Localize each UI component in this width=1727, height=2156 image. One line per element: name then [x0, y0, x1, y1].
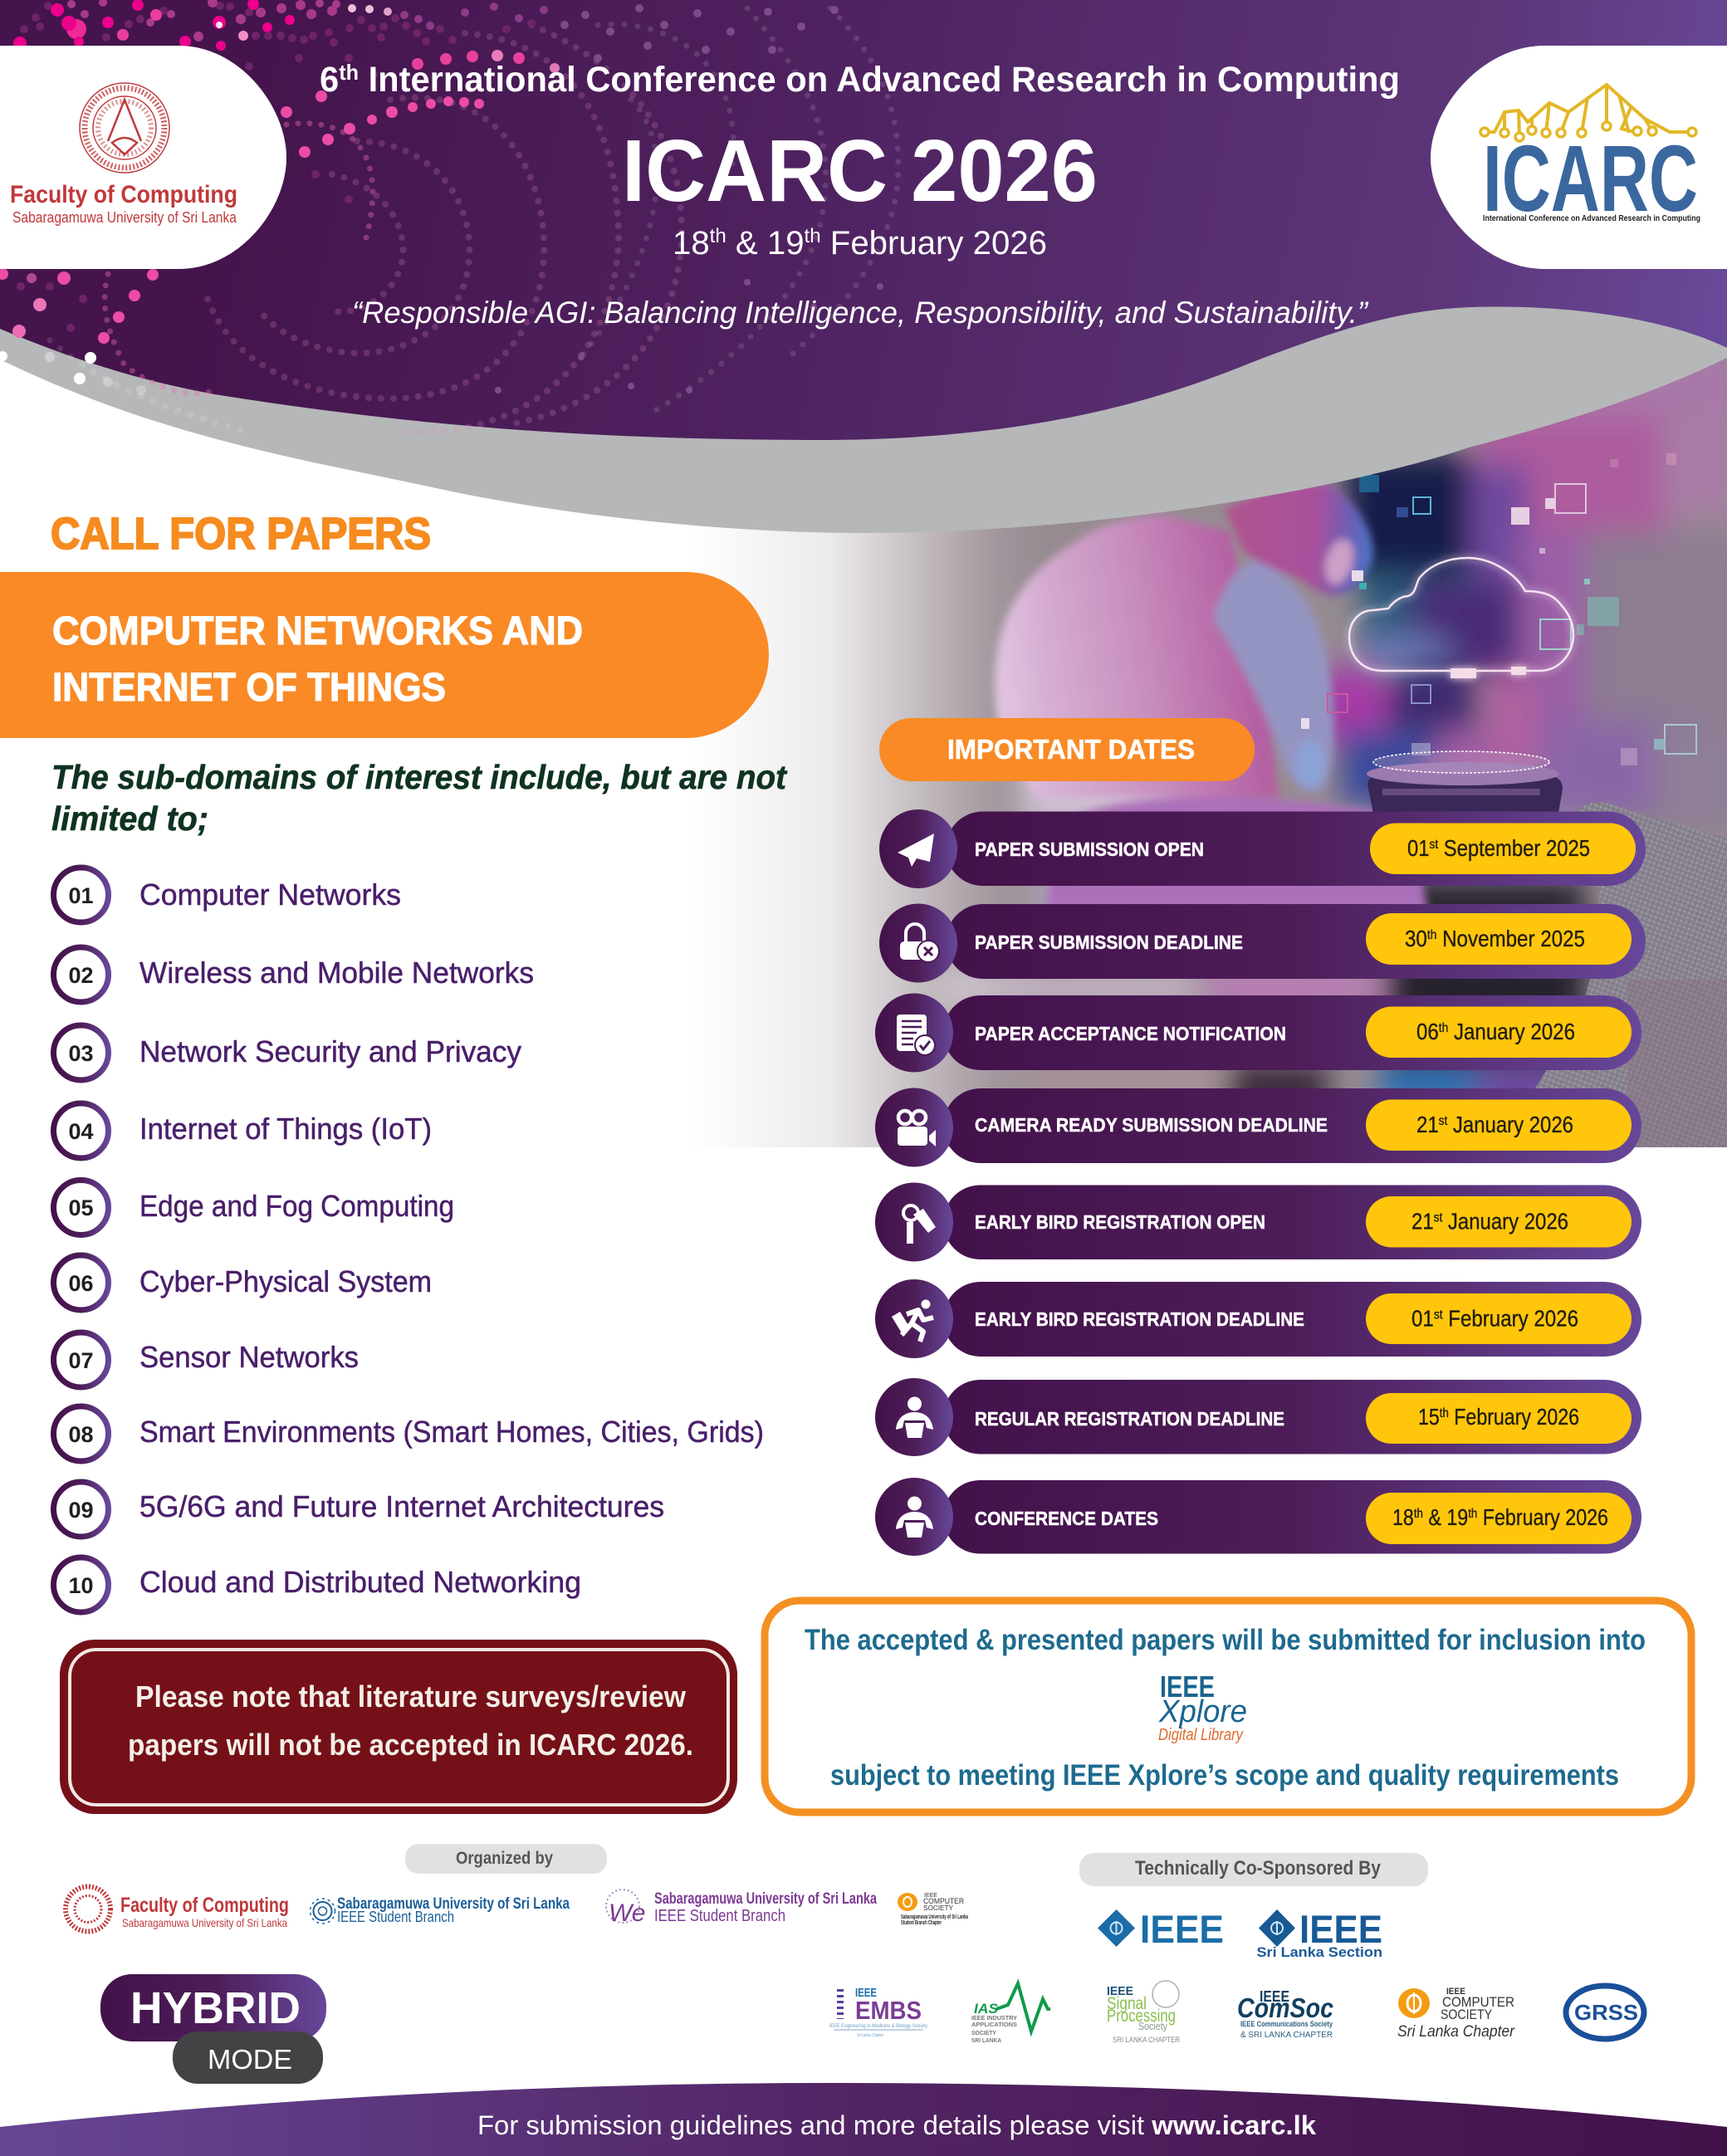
date row: camera ready submission deadline [875, 1088, 1641, 1167]
society logo: GRSS [1566, 1986, 1644, 2039]
date row: camera ready submission deadline: CAMERA READY SUBMISSION DEADLINE [975, 1114, 1328, 1136]
society logo: Computer Society Sri Lanka Chapter: IEEE [1446, 1987, 1465, 1997]
date row: paper submission deadline [879, 903, 1646, 983]
title: ICARC 2026: ICARC 2026 [622, 122, 1098, 220]
date pill: st [1430, 838, 1439, 852]
conference theme: “Responsible AGI: Balancing Intelligence, Responsibility, and Sustainability.” [352, 296, 1369, 330]
organized by label [405, 1844, 607, 1874]
date pill: 15 [1418, 1404, 1444, 1430]
society logo: EMBS: IEEE [855, 1986, 877, 2000]
date row: paper submission open: PAPER SUBMISSION OPEN [975, 838, 1204, 860]
date pill: January 2026 [1447, 1112, 1573, 1137]
date row: conference dates: CONFERENCE DATES [975, 1508, 1158, 1529]
date row: paper acceptance notification: PAPER ACCEPTANCE NOTIFICATION [975, 1023, 1286, 1044]
society logo: EMBS: EMBS [855, 1996, 922, 2025]
society logo: IAS [971, 1983, 1050, 2044]
logo subtitle: Sabaragamuwa University of Sri Lanka [12, 209, 237, 226]
track title: COMPUTER NETWORKS AND [52, 609, 583, 653]
logo: SUSL IEEE Student Branch [311, 1895, 570, 1925]
logo: SUSL IEEE Student Branch: Sabaragamuwa University of Sri Lanka [337, 1895, 570, 1913]
conference date: February 2026 [821, 225, 1047, 262]
bright pink dots [0, 0, 560, 395]
society logo: Computer Society Sri Lanka Chapter: SOCIETY [1441, 2007, 1492, 2022]
date row: conference dates [875, 1478, 1641, 1556]
society logo: Computer Society Sri Lanka Chapter [1397, 1987, 1515, 2041]
important dates heading [879, 718, 1255, 781]
society logo: IAS: IEEE INDUSTRY [971, 2016, 1017, 2022]
IEEE Xplore logo: Xplore [1158, 1694, 1247, 1729]
item 09: 09 [68, 1498, 94, 1523]
item 02: Wireless and Mobile Networks [139, 956, 534, 990]
society logo: ComSoc [1237, 1988, 1333, 2040]
sub-domains intro: The sub-domains of interest include, but are not [51, 758, 788, 796]
date pill [1366, 1099, 1632, 1151]
item 02: 02 [68, 963, 94, 988]
item 06: Cyber-Physical System [139, 1264, 432, 1298]
icon: presenter at podium [875, 1478, 953, 1556]
society logo: IAS: APPLICATIONS [971, 2022, 1017, 2028]
society logo: ComSoc: ComSoc [1237, 1992, 1333, 2023]
date row: paper submission deadline: PAPER SUBMISSION DEADLINE [975, 931, 1243, 953]
date pill: 18 [1392, 1504, 1418, 1530]
conference date: th [710, 225, 727, 247]
date pill: February 2026 [1443, 1305, 1578, 1332]
logo: Faculty of Computing [66, 1886, 289, 1931]
co-sponsor logo: IEEE [1098, 1907, 1224, 1951]
decorative dotted swirl [50, 8, 898, 433]
date pill: 21 [1416, 1112, 1442, 1137]
item 07 [53, 1332, 359, 1387]
society logo: Signal Processing: Processing [1107, 2007, 1176, 2026]
item 06 [53, 1255, 432, 1310]
date pill: th [1439, 1021, 1448, 1035]
mode pill [173, 2031, 323, 2084]
date pill: th [1468, 1507, 1477, 1521]
society logo: IAS: SRI LANKA [971, 2038, 1001, 2044]
item 08 [53, 1406, 764, 1461]
title: conference name: 6 [320, 60, 340, 100]
date row: early bird registration deadline: EARLY BIRD REGISTRATION DEADLINE [975, 1308, 1304, 1330]
IEEE Xplore logo [1158, 1670, 1247, 1744]
date row: early bird registration open [875, 1182, 1641, 1262]
co-sponsor logo: IEEE Sri Lanka Section: Sri Lanka Section [1257, 1944, 1382, 1960]
IEEE Xplore logo: Digital Library [1158, 1726, 1244, 1744]
item 01: 01 [68, 883, 94, 908]
logo: SUSL IEEE WIE: Sabaragamuwa University of Sri Lanka [654, 1890, 877, 1908]
hybrid mode badge: MODE [208, 2044, 292, 2075]
item 09: 5G/6G and Future Internet Architectures [139, 1489, 664, 1523]
society logo: ComSoc: & SRI LANKA CHAPTER [1240, 2031, 1333, 2040]
date pill [1366, 1293, 1632, 1344]
left logo panel: Faculty of Computing [0, 46, 286, 269]
society logo: Signal Processing: Signal [1107, 1994, 1147, 2013]
date pill: February 2026 [1449, 1404, 1579, 1430]
faint scattered dots [17, 2, 536, 332]
date pill [1366, 913, 1632, 965]
item 05 [53, 1181, 454, 1235]
item 10 [53, 1557, 581, 1612]
logo: Computer Society student chapter: Student Branch Chapter [901, 1920, 942, 1926]
date pill [1370, 824, 1636, 874]
footer band [0, 2083, 1727, 2156]
sub-domains intro: limited to; [51, 799, 208, 838]
date pill: st [1434, 1210, 1443, 1225]
co-sponsor logo: IEEE Sri Lanka Section [1257, 1907, 1382, 1960]
item 03 [53, 1025, 521, 1080]
item 03: 03 [68, 1041, 94, 1066]
item 01 [53, 868, 401, 922]
society logo: Signal Processing [1107, 1981, 1180, 2044]
icon: paper plane [879, 809, 957, 888]
item 08: 08 [68, 1422, 94, 1447]
icon: key [875, 1182, 953, 1262]
society logo: ComSoc: IEEE Communications Society [1240, 2020, 1333, 2028]
date row: early bird registration open: EARLY BIRD REGISTRATION OPEN [975, 1211, 1265, 1233]
co-sponsor logo: IEEE: IEEE [1140, 1907, 1224, 1951]
logo: SUSL IEEE WIE [606, 1890, 877, 1927]
item 10: Cloud and Distributed Networking [139, 1565, 581, 1599]
date pill [1366, 1006, 1632, 1058]
header band [0, 0, 1727, 440]
logo: SUSL IEEE WIE: IEEE Student Branch [654, 1907, 785, 1925]
notice: literature surveys not accepted: papers will not be accepted in ICARC 2026. [128, 1728, 693, 1762]
item 06: 06 [68, 1271, 94, 1296]
item 04 [53, 1103, 432, 1158]
icon: runner [875, 1279, 953, 1358]
organized by label: Organized by [456, 1849, 553, 1868]
date row: early bird registration deadline [875, 1279, 1641, 1358]
conference date: 18 [673, 225, 709, 262]
title: conference name: th [339, 60, 359, 85]
item 08: Smart Environments (Smart Homes, Cities, Grids) [139, 1415, 764, 1449]
date pill: September 2025 [1438, 835, 1590, 861]
icon: video camera [875, 1088, 953, 1167]
icon: university seal [80, 83, 169, 173]
icon: circuit mountain [1480, 85, 1696, 141]
date pill [1366, 1393, 1632, 1444]
IEEE Xplore logo: IEEE [1160, 1670, 1215, 1704]
icon: glowing cloud [1349, 558, 1573, 678]
logo: Computer Society student chapter: SOCIETY [923, 1904, 954, 1912]
hybrid mode badge [100, 1974, 326, 2084]
logo wordmark: Faculty of Computing [10, 181, 237, 208]
important dates heading: IMPORTANT DATES [947, 734, 1195, 765]
logo: Computer Society student chapter: Sabaragamuwa University of Sri Lanka [901, 1914, 968, 1920]
date row: paper submission open [879, 809, 1646, 888]
date pill: th [1427, 928, 1436, 942]
item 01: Computer Networks [139, 878, 401, 912]
footer text: For submission guidelines and more details please visit www.icarc.lk [477, 2110, 1316, 2140]
heading: call for papers: CALL FOR PAPERS [51, 509, 431, 559]
society logo: GRSS: GRSS [1574, 2000, 1638, 2025]
icon: watch with holographic base [1367, 751, 1563, 818]
item 07: 07 [68, 1348, 94, 1373]
conference date: & 19 [727, 225, 805, 262]
sub-domains intro [51, 758, 788, 838]
grey swoosh [0, 295, 1727, 533]
date pill: st [1434, 1308, 1443, 1322]
date pill: 30 [1405, 926, 1431, 951]
society logo: Computer Society Sri Lanka Chapter: COMPUTER [1442, 1994, 1514, 2010]
logo: Computer Society student chapter: COMPUTER [923, 1897, 964, 1905]
logo: Computer Society student chapter: IEEE [924, 1893, 937, 1899]
logo: Computer Society student chapter [898, 1893, 968, 1926]
IEEE Xplore callout: subject to meeting IEEE Xplore’s scope and quality requirements [830, 1759, 1619, 1792]
logo: SUSL IEEE WIE: We [609, 1899, 645, 1927]
society logo: IAS: IAS [974, 2001, 999, 2017]
society logo: Signal Processing: IEEE [1107, 1984, 1133, 1998]
organizer logos [66, 1886, 968, 1931]
date pill: 01 [1407, 835, 1433, 861]
item 07: Sensor Networks [139, 1340, 359, 1374]
right logo panel: ICARC [1431, 46, 1727, 269]
co-sponsor logo: IEEE Sri Lanka Section: IEEE [1299, 1907, 1382, 1951]
society logo: ComSoc: IEEE [1260, 1988, 1289, 2005]
item 09 [53, 1482, 664, 1537]
date pill: January 2026 [1442, 1209, 1568, 1234]
logo: Faculty of Computing: Sabaragamuwa University of Sri Lanka [122, 1916, 287, 1929]
society logo: Signal Processing: SRI LANKA CHAPTER [1113, 2036, 1180, 2044]
medium scattered dots [67, 0, 883, 394]
society logo: IAS: SOCIETY [971, 2031, 996, 2036]
society logo: Computer Society Sri Lanka Chapter: Sri Lanka Chapter [1397, 2023, 1515, 2041]
hybrid mode badge: HYBRID [130, 1983, 301, 2033]
date pill: 21 [1411, 1209, 1437, 1234]
item 05: 05 [68, 1195, 94, 1220]
conference date: th [805, 225, 821, 247]
icon: document check [875, 993, 953, 1073]
notice: literature surveys not accepted [60, 1640, 737, 1814]
date pill: th [1414, 1507, 1423, 1521]
society logo: EMBS [829, 1986, 927, 2038]
society logo: EMBS: Sri Lanka Chapter [857, 2033, 883, 2038]
date pill [1366, 1493, 1632, 1544]
date pill: & 19 [1423, 1504, 1468, 1530]
item 10: 10 [68, 1573, 94, 1598]
track banner: INTERNET OF THINGS [52, 666, 446, 710]
technically co-sponsored label [1079, 1853, 1428, 1886]
background photo: hand touching holographic cloud [689, 349, 1727, 1154]
date pill: st [1439, 1114, 1448, 1128]
notice: literature surveys not accepted: Please note that literature surveys/review [135, 1679, 687, 1714]
item 02 [53, 947, 534, 1002]
date pill: November 2025 [1436, 926, 1585, 951]
date pill: February 2026 [1477, 1504, 1608, 1530]
date pill: 01 [1411, 1305, 1437, 1332]
logo: Faculty of Computing: Faculty of Computing [120, 1894, 289, 1917]
date row: regular registration deadline: REGULAR REGISTRATION DEADLINE [975, 1408, 1284, 1430]
icon: presenter at podium [875, 1378, 953, 1456]
technically co-sponsored label: Technically Co-Sponsored By [1135, 1857, 1382, 1880]
icon: lock [879, 903, 957, 983]
date pill: January 2026 [1448, 1019, 1575, 1044]
item 04: 04 [68, 1119, 94, 1144]
date row: paper acceptance notification [875, 993, 1641, 1073]
title: conference name: International Conference on Advanced Research in Computing [359, 60, 1400, 100]
date pill: th [1440, 1406, 1449, 1420]
hologram squares [1301, 453, 1696, 765]
item 03: Network Security and Privacy [139, 1034, 521, 1068]
track banner [0, 572, 769, 738]
item 05: Edge and Fog Computing [139, 1189, 454, 1223]
date pill: 06 [1416, 1019, 1442, 1044]
society logo: EMBS: IEEE Engineering in Medicine & Biology Society [829, 2024, 927, 2029]
logo: SUSL IEEE Student Branch: IEEE Student Branch [337, 1909, 454, 1925]
IEEE Xplore callout [765, 1601, 1691, 1812]
list of sub-domains [53, 868, 764, 1612]
date row: regular registration deadline [875, 1378, 1641, 1456]
society logo: Signal Processing: Society [1138, 2020, 1167, 2032]
item 04: Internet of Things (IoT) [139, 1112, 432, 1146]
date pill [1366, 1196, 1632, 1247]
